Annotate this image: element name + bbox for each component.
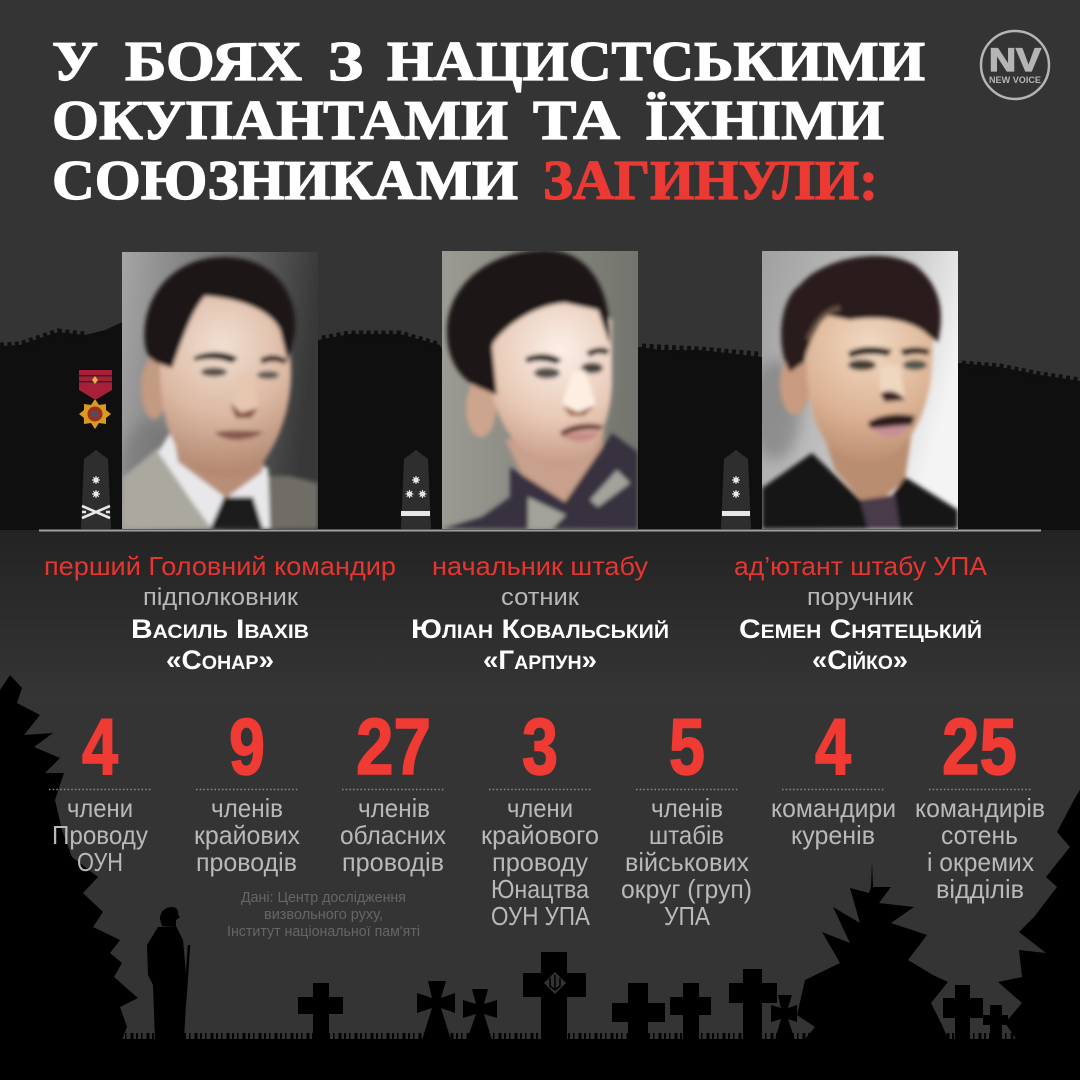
foreground: central fir tree	[797, 862, 950, 1045]
stat: 3 members of youth leadership: Юнацтва	[491, 874, 589, 904]
caption: Sniatetskyi	[734, 551, 988, 675]
caption: Ivakhiv: перший Головний командир	[44, 551, 396, 581]
title: ЗАГИНУЛИ:	[543, 150, 878, 212]
stat: 5 members of military district staffs: членів	[651, 793, 723, 823]
foreground: left fir tree	[0, 675, 138, 1045]
stat: 27 members of oblast leaderships	[340, 702, 446, 877]
title: БОЯХ	[125, 31, 302, 93]
stat: 9 members of regional leaderships: проводів	[196, 847, 297, 877]
stat: 25 company commanders: командирів	[915, 793, 1045, 823]
stat: 4 members of OUN leadership: ОУН	[77, 847, 123, 877]
stat: 4 battalion commanders: командири	[771, 793, 896, 823]
caption: Kovalskyi: «Гарпун»	[483, 645, 597, 675]
stat: 27 members of oblast leaderships: членів	[358, 793, 430, 823]
stat: 5 members of military district staffs: військових	[625, 847, 749, 877]
logo: NV New Voice	[981, 31, 1049, 99]
caption: Ivakhiv	[44, 551, 396, 675]
title: У	[52, 31, 98, 93]
icon: trident on the main cross	[544, 972, 566, 994]
source note	[227, 890, 420, 940]
title: ТА	[533, 90, 621, 152]
stat: 25 company commanders: і окремих	[927, 847, 1034, 877]
stat: 27 members of oblast leaderships: обласних	[340, 820, 446, 850]
stat: 5 members of military district staffs: округ (груп)	[621, 874, 752, 904]
stat: 25 company commanders: сотень	[941, 820, 1018, 850]
stat: 9 members of regional leaderships	[194, 702, 300, 877]
stat: 9 members of regional leaderships: крайових	[194, 820, 300, 850]
foreground: ground and grass	[0, 1037, 1080, 1080]
medal	[79, 370, 112, 429]
stat: 5 members of military district staffs: штабів	[649, 820, 724, 850]
caption: Sniatetskyi: ад’ютант штабу УПА	[734, 551, 988, 581]
stat: 5 members of military district staffs: 5	[669, 702, 705, 791]
portrait: Vasyl Ivakhiv	[120, 252, 318, 529]
title: З	[328, 31, 363, 93]
stat: 27 members of oblast leaderships: 27	[356, 702, 431, 791]
stat: 4 battalion commanders	[771, 702, 896, 850]
shoulder board: lieutenant colonel	[81, 450, 111, 529]
stat: 3 members of youth leadership: проводу	[492, 847, 588, 877]
stat: 25 company commanders: відділів	[936, 874, 1024, 904]
mountain silhouette	[0, 321, 1080, 530]
logo: NV New Voice: NEW VOICE	[989, 75, 1041, 86]
title: ОКУПАНТАМИ	[52, 90, 508, 152]
caption: Kovalskyi: Юліан Ковальський	[411, 614, 669, 644]
stat: 4 members of OUN leadership	[49, 702, 151, 877]
caption: Kovalskyi	[411, 551, 669, 675]
portrait: Semen Sniatetskyi	[750, 251, 958, 529]
stat: 5 members of military district staffs: УПА	[664, 901, 711, 931]
stat: 4 battalion commanders: куренів	[791, 820, 875, 850]
caption: Kovalskyi: сотник	[501, 584, 580, 611]
stat: 4 members of OUN leadership: 4	[82, 702, 118, 791]
foreground: crosses	[298, 952, 1008, 1040]
stat: 25 company commanders: 25	[942, 702, 1017, 791]
shoulder board: lieutenant	[721, 450, 751, 529]
title: НАЦИСТСЬКИМИ	[387, 31, 925, 93]
stat: 3 members of youth leadership	[481, 702, 599, 931]
stat: 4 members of OUN leadership: члени	[67, 793, 133, 823]
shoulder board: captain	[401, 450, 431, 529]
foreground: soldier silhouette	[147, 907, 189, 1040]
stat: 3 members of youth leadership: 3	[522, 702, 558, 791]
stat: 3 members of youth leadership: ОУН УПА	[491, 901, 591, 931]
stat: 4 members of OUN leadership: Проводу	[52, 820, 148, 850]
stat: 27 members of oblast leaderships: проводів	[342, 847, 444, 877]
caption: Sniatetskyi: «Сійко»	[812, 645, 908, 675]
title: СОЮЗНИКАМИ	[52, 150, 518, 212]
stat: 9 members of regional leaderships: членів	[211, 793, 283, 823]
stat: 9 members of regional leaderships: 9	[229, 702, 265, 791]
source note: визвольного руху,	[264, 907, 383, 923]
portrait: Yulian Kovalskyi	[442, 250, 638, 529]
caption: Ivakhiv: Василь Івахів	[131, 614, 309, 644]
caption: Sniatetskyi: поручник	[807, 584, 914, 611]
stat: 25 company commanders	[915, 702, 1045, 904]
caption: Ivakhiv: «Сонар»	[166, 645, 274, 675]
stat: 5 members of military district staffs	[621, 702, 752, 931]
title	[52, 31, 925, 212]
foreground: right fir tree	[998, 790, 1080, 1045]
baseline rule	[39, 530, 1041, 532]
stat: 3 members of youth leadership: крайового	[481, 820, 599, 850]
source note: Інститут національної пам'яті	[227, 924, 420, 940]
caption: Ivakhiv: підполковник	[143, 584, 299, 611]
stat: 4 battalion commanders: 4	[815, 702, 851, 791]
caption: Kovalskyi: начальник штабу	[432, 551, 648, 581]
title: ЇХНІМИ	[645, 90, 884, 152]
source note: Дані: Центр дослідження	[241, 890, 406, 906]
logo: NV New Voice: NV	[989, 42, 1042, 78]
caption: Sniatetskyi: Семен Снятецький	[739, 614, 982, 644]
stat: 3 members of youth leadership: члени	[507, 793, 573, 823]
